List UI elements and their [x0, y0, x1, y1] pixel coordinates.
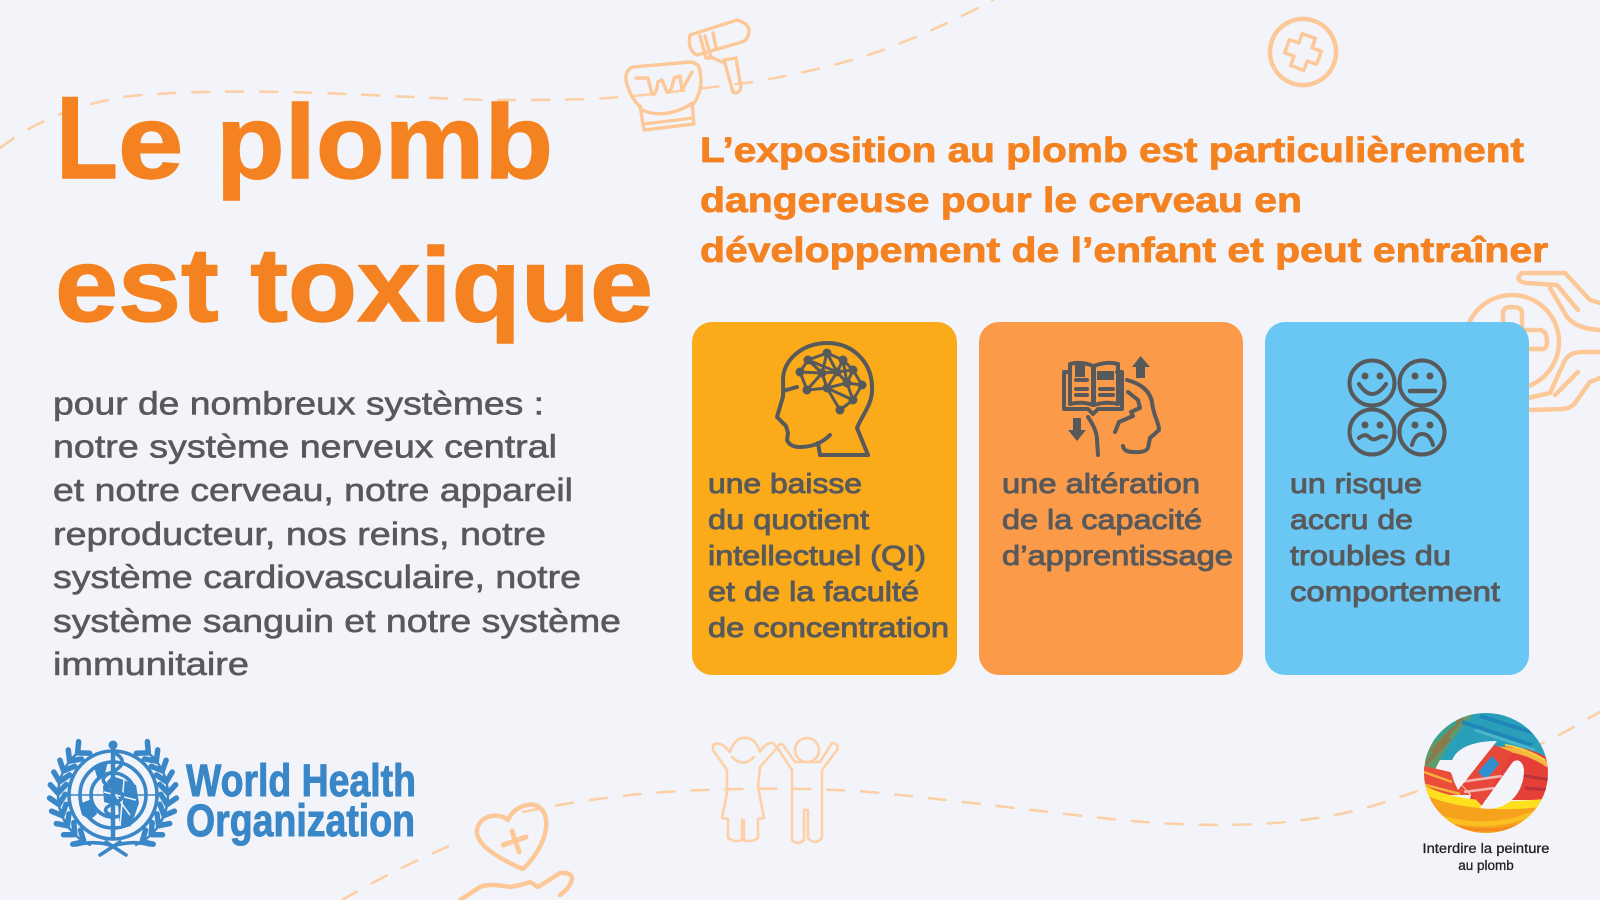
icon: head with neural network brain	[777, 343, 872, 455]
card text: du quotient	[708, 504, 869, 535]
card text: accru de	[1290, 504, 1413, 535]
card text: de la capacité	[1002, 504, 1202, 535]
card text: d’apprentissage	[1002, 540, 1233, 571]
title: Le plomb	[56, 72, 553, 203]
caption: au plomb	[1458, 858, 1514, 873]
heading: danger for the developing child brain: dangereuse pour le cerveau en	[700, 181, 1302, 220]
card text: une altération	[1002, 468, 1200, 499]
text block: affected body systems: pour de nombreux systèmes :	[53, 386, 544, 422]
decorative dashed line: bottom	[342, 712, 1600, 900]
text block: affected body systems: système sanguin et notre système	[53, 603, 621, 639]
panel: lower IQ	[692, 322, 957, 675]
icon: open hand under heart	[460, 873, 572, 900]
emblem: globe, staff and wreath	[49, 740, 177, 855]
panel: behaviour problems	[1265, 322, 1529, 675]
icon: heart with cross	[477, 805, 546, 869]
title: est toxique	[55, 227, 653, 344]
icon: paint roller	[689, 20, 749, 93]
heading: danger for the developing child brain: L’exposition au plomb est particulièrement	[700, 131, 1524, 170]
icon: medical cross in circle	[1261, 10, 1345, 94]
icon: four mood faces	[1350, 360, 1444, 454]
text block: affected body systems: notre système nerveux central	[53, 428, 557, 464]
wordmark: Organization	[186, 795, 415, 846]
icon: two children raising arms	[713, 738, 838, 843]
wordmark	[186, 755, 416, 846]
card text: troubles du	[1290, 540, 1451, 571]
text block: affected body systems: immunitaire	[53, 646, 249, 682]
card text: et de la faculté	[708, 576, 919, 607]
card text: un risque	[1290, 468, 1422, 499]
wordmark: World Health	[186, 755, 416, 806]
card text	[708, 468, 949, 643]
icon: open book and head with arrows	[1064, 356, 1159, 455]
card text: de concentration	[708, 612, 949, 643]
heading: danger for the developing child brain	[700, 131, 1548, 270]
text block: affected body systems: et notre cerveau, notre appareil	[53, 472, 573, 508]
emblem: paint stroke ring	[1424, 713, 1548, 833]
heading: danger for the developing child brain: développement de l’enfant et peut entraîner	[700, 231, 1548, 270]
card text: une baisse	[708, 468, 862, 499]
logo: ban lead paint	[1420, 710, 1555, 873]
panel: impaired learning	[979, 322, 1243, 675]
card text: comportement	[1290, 576, 1500, 607]
text block: affected body systems: système cardiovasculaire, notre	[53, 559, 581, 595]
card text	[1290, 468, 1500, 607]
icon: hands protecting a cross	[1465, 273, 1600, 410]
card text	[1002, 468, 1233, 571]
text block: affected body systems	[53, 386, 621, 682]
icon: paint bucket	[626, 62, 701, 130]
decorative dashed line: top	[0, 0, 993, 148]
title	[55, 72, 653, 344]
logo: World Health Organization	[49, 740, 416, 855]
caption: Interdire la peinture	[1422, 841, 1550, 856]
card text: intellectuel (QI)	[708, 540, 926, 571]
text block: affected body systems: reproducteur, nos reins, notre	[53, 516, 546, 552]
caption	[1422, 841, 1550, 873]
